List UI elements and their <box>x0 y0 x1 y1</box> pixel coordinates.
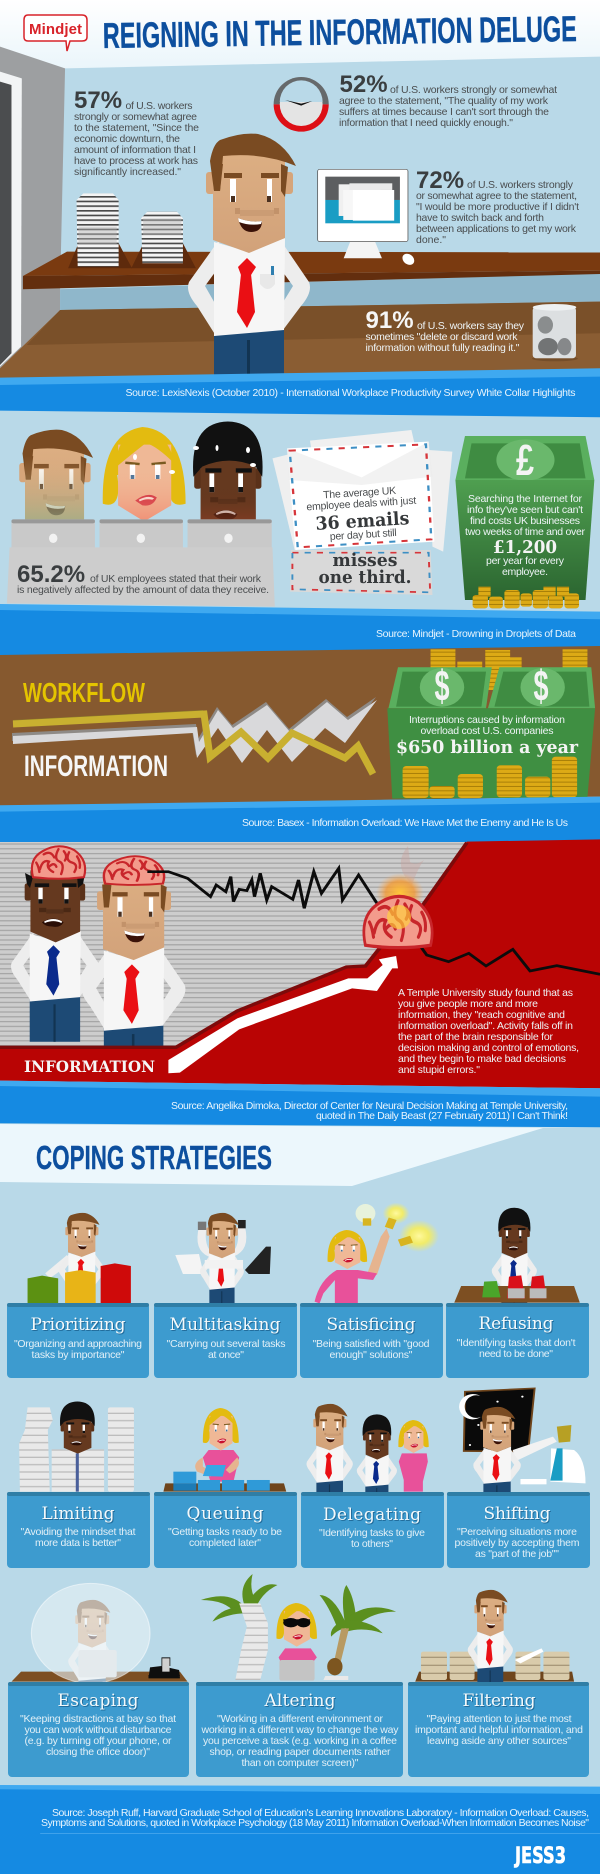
source band 4: Source: Angelika Dimoka, Director of Center for Neural Decision Making at Temple University, <box>171 1100 568 1112</box>
money: dollar notes: $ <box>534 662 548 711</box>
figure: multitasking <box>175 1213 271 1311</box>
card: queuing: completed later" <box>189 1537 261 1549</box>
money: dollar notes: $650 billion a year <box>396 737 578 758</box>
money: pound note: find costs UK businesses <box>470 515 580 527</box>
icon: jar of crumpled paper <box>532 304 578 361</box>
figure: altering <box>201 1574 396 1681</box>
source band 4 <box>0 1081 600 1127</box>
stat: 52 percent: suffers at times because I can't sort through the <box>339 106 549 118</box>
card: delegating: to others" <box>351 1538 393 1550</box>
source text <box>41 1807 589 1829</box>
stat: 57 percent: amount of information that I <box>74 144 196 156</box>
card: satisficing: Satisficing <box>326 1315 416 1335</box>
stat: 57 percent: strongly or somewhat agree <box>74 111 197 123</box>
source text: Symptoms and Solutions, quoted in Workplace Psychology (18 May 2011) Information Overload-When Information Becomes Noise" <box>41 1817 589 1829</box>
card: altering: shop, or reading paper documents rather <box>210 1746 391 1758</box>
card: shifting: "Perceiving situations more <box>457 1526 577 1538</box>
card: escaping: closing the office door)" <box>46 1746 150 1758</box>
envelopes: one third. <box>318 567 412 588</box>
card: limiting <box>7 1492 150 1568</box>
stat: 91 percent <box>366 307 525 354</box>
stat: 91 percent: of U.S. workers say they <box>417 320 525 332</box>
card: limiting: "Avoiding the mindset that <box>20 1526 136 1538</box>
card: shifting: as "part of the job"" <box>475 1548 559 1560</box>
stat: 57 percent <box>74 87 199 178</box>
source band 2: Source: Mindjet - Drowning in Droplets of Data <box>376 628 576 640</box>
card: shifting: Shifting <box>484 1504 551 1524</box>
stat: 72 percent <box>416 167 579 246</box>
stat: 52 percent: agree to the statement, "The quality of my work <box>339 95 549 107</box>
card: prioritizing: "Organizing and approaching <box>14 1338 142 1350</box>
card: filtering: "Paying attention to just the most <box>426 1713 572 1725</box>
label: workflow: WORKFLOW <box>23 677 145 708</box>
card: escaping: you can work without disturbance <box>24 1724 172 1736</box>
card: prioritizing: tasks by importance" <box>32 1349 125 1361</box>
laptops desk <box>7 519 275 607</box>
card: filtering: important and helpful information, and <box>415 1724 583 1736</box>
money: dollar notes <box>387 649 595 799</box>
stat: 57 percent: have to process at work has <box>74 155 198 167</box>
stat: 91 percent: 91% <box>366 307 414 334</box>
figure: delegating <box>306 1404 429 1505</box>
money: pound note: £ <box>516 436 534 485</box>
text: Temple University study: and they begin to make bad decisions <box>398 1053 566 1065</box>
card: altering: "Working in a different environment or <box>217 1713 384 1725</box>
heading: COPING STRATEGIES <box>36 1139 272 1176</box>
gold coins <box>473 587 579 608</box>
card: queuing: Queuing <box>186 1504 264 1524</box>
gold coins <box>403 757 577 798</box>
card: multitasking <box>154 1303 297 1378</box>
text: Temple University study: information, they "reach cognitive and <box>398 1009 565 1021</box>
stat: 57 percent: economic downturn, the <box>74 133 180 145</box>
label: information: INFORMATION <box>24 750 168 783</box>
envelopes: misses <box>332 550 398 571</box>
envelopes <box>272 430 452 595</box>
card: queuing <box>154 1492 297 1568</box>
stat: 72 percent: have to switch back and forth <box>416 212 544 224</box>
logo: Mindjet <box>24 15 87 51</box>
text: Temple University study: the part of the brain responsible for <box>398 1031 554 1043</box>
card: prioritizing: Prioritizing <box>30 1315 126 1335</box>
card: multitasking: at once" <box>208 1349 244 1361</box>
card: refusing <box>446 1303 589 1378</box>
money: pound note <box>455 436 594 608</box>
stat: 72 percent: or somewhat agree to the statement, <box>416 190 577 202</box>
panel: office room <box>0 0 600 417</box>
stat: 57 percent: of U.S. workers <box>126 100 192 112</box>
money: pound note: info they've seen but can't <box>467 504 583 516</box>
source band 1 <box>0 368 600 417</box>
source band 1: Source: LexisNexis (October 2010) - International Workplace Productivity Survey White Collar Highlights <box>126 387 576 399</box>
card: escaping: (e.g. by turning off your phone, or <box>24 1735 172 1747</box>
card: queuing: "Getting tasks ready to be <box>168 1526 282 1538</box>
stat: 65.2 percent: 65.2% <box>17 561 85 588</box>
icon: brains on heads <box>32 846 164 885</box>
card: prioritizing <box>7 1303 149 1378</box>
money: dollar notes: $ <box>434 662 450 711</box>
room walls and floor <box>0 0 600 380</box>
source band 3: Source: Basex - Information Overload: We Have Met the Enemy and He Is Us <box>242 817 568 829</box>
card: altering: you perceive a task (e.g. working in a coffee <box>203 1735 397 1747</box>
card: filtering <box>408 1682 589 1777</box>
money: dollar notes: Interruptions caused by information <box>409 714 565 726</box>
stat: 52 percent: of U.S. workers strongly or somewhat <box>390 84 557 96</box>
money: dollar notes: overload cost U.S. companies <box>420 725 554 737</box>
stat: 57 percent: significantly increased." <box>74 166 181 178</box>
stat: 65.2 percent <box>17 561 269 596</box>
money: pound note: £1,200 <box>493 537 557 558</box>
panel: cognitive overload <box>0 839 600 1127</box>
figure: satisficing <box>315 1203 439 1303</box>
logo: JESS3: JESS3 <box>514 1844 566 1869</box>
money: pound note: employee. <box>502 566 548 578</box>
red rising area <box>0 839 600 1088</box>
card: delegating: "Identifying tasks to give <box>319 1527 425 1539</box>
money: pound note: Searching the Internet for <box>468 493 582 505</box>
card: limiting: Limiting <box>42 1504 115 1524</box>
heading background <box>0 1124 600 1186</box>
stat: 52 percent: 52% <box>340 71 388 98</box>
paper stacks on desk <box>68 193 196 268</box>
card: refusing: "Identifying tasks that don't <box>456 1337 576 1349</box>
card: altering: than on computer screen)" <box>242 1757 359 1769</box>
card: filtering: leaving aside any other sources" <box>427 1735 571 1747</box>
envelopes: employee deals with just <box>306 495 417 513</box>
text: Temple University study: and stupid errors." <box>398 1064 480 1076</box>
figure: refusing <box>454 1208 580 1309</box>
footer band <box>0 1785 600 1874</box>
stat: 72 percent: between applications to get my work <box>416 223 577 235</box>
card: altering: Altering <box>264 1691 336 1711</box>
figure: filtering <box>415 1590 574 1691</box>
stat: 72 percent: of U.S. workers strongly <box>467 179 574 191</box>
stat: 52 percent: information that I need quickly enough." <box>339 117 513 129</box>
icon: arrow <box>168 956 398 1073</box>
chart: workflow and information lines <box>12 697 377 774</box>
text: Temple University study: information overload". Activity falls off in <box>398 1020 573 1032</box>
source band 3 <box>0 797 600 847</box>
money: pound note: per year for every <box>486 555 565 567</box>
figure: limiting <box>19 1402 134 1492</box>
two men with exposed brains <box>11 868 185 1078</box>
card: multitasking: "Carrying out several tasks <box>166 1338 286 1350</box>
source band 2 <box>0 604 600 658</box>
icon: computer monitor <box>318 169 417 267</box>
envelopes: per day but still <box>329 527 397 543</box>
text: Temple University study: you give people more and more <box>398 998 538 1010</box>
card: filtering: Filtering <box>462 1691 536 1711</box>
card: limiting: more data is better" <box>35 1537 121 1549</box>
panel: UK employees <box>0 422 600 658</box>
label: information: INFORMATION <box>24 1057 155 1076</box>
stat: 91 percent: sometimes "delete or discard work <box>366 331 518 343</box>
card: escaping <box>8 1682 189 1777</box>
card: satisficing: "Being satisfied with "good <box>312 1338 430 1350</box>
card: delegating: Delegating <box>323 1505 421 1525</box>
three worried faces <box>19 422 263 538</box>
text: Temple University study <box>398 987 579 1076</box>
stat: 72 percent: done." <box>416 234 446 246</box>
envelopes: The average UK <box>323 485 396 501</box>
figure: shifting <box>459 1388 586 1505</box>
striped background <box>0 842 480 1057</box>
figure: escaping <box>11 1583 188 1703</box>
figure: prioritizing <box>28 1213 131 1308</box>
text: Temple University study: A Temple University study found that as <box>398 987 573 999</box>
card: escaping: Escaping <box>58 1691 139 1711</box>
logo: Mindjet: Mindjet <box>29 21 82 38</box>
stat: 57 percent: 57% <box>74 87 122 114</box>
source band 4: quoted in The Daily Beast (27 February 2011) I Can't Think! <box>316 1110 568 1122</box>
card: satisficing <box>300 1303 443 1378</box>
figure: queuing <box>163 1408 286 1492</box>
black EEG line <box>147 868 600 974</box>
panel: coping strategies <box>0 1124 600 1777</box>
card: refusing: Refusing <box>478 1314 554 1334</box>
icon: clock <box>274 77 329 132</box>
stat: 91 percent: information without fully reading it." <box>366 342 520 354</box>
card: delegating <box>301 1492 444 1568</box>
icon: burning brain <box>364 846 432 948</box>
brown background <box>0 646 600 806</box>
money: pound note: two weeks of time and over <box>465 526 586 538</box>
card: escaping: "Keeping distractions at bay so that <box>20 1713 176 1725</box>
man at desk <box>188 134 310 392</box>
card: shifting: positively by accepting them <box>454 1537 580 1549</box>
stat: 65.2 percent: of UK employees stated that their work <box>90 573 262 585</box>
stat: 72 percent: "I would be more productive if I didn't <box>416 201 579 213</box>
card: multitasking: Multitasking <box>170 1315 281 1335</box>
stat: 52 percent <box>339 71 557 129</box>
source text: Source: Joseph Ruff, Harvard Graduate School of Education's Learning Innovations Laboratory - Information Overload: Causes, <box>52 1807 589 1819</box>
card: altering <box>196 1682 403 1777</box>
card: satisficing: enough" solutions" <box>330 1349 413 1361</box>
card: shifting <box>447 1492 590 1568</box>
text: Temple University study: decision making and control of emotions, <box>398 1042 579 1054</box>
panel: workflow vs information <box>0 646 600 847</box>
stat: 72 percent: 72% <box>416 167 464 194</box>
stat: 57 percent: to the statement, "Since the <box>74 122 199 134</box>
card: altering: working in a different way to change the way <box>200 1724 399 1736</box>
stat: 65.2 percent: is negatively affected by the amount of data they receive. <box>17 584 269 596</box>
envelopes: 36 emails <box>315 508 410 535</box>
card: refusing: need to be done" <box>479 1348 553 1360</box>
